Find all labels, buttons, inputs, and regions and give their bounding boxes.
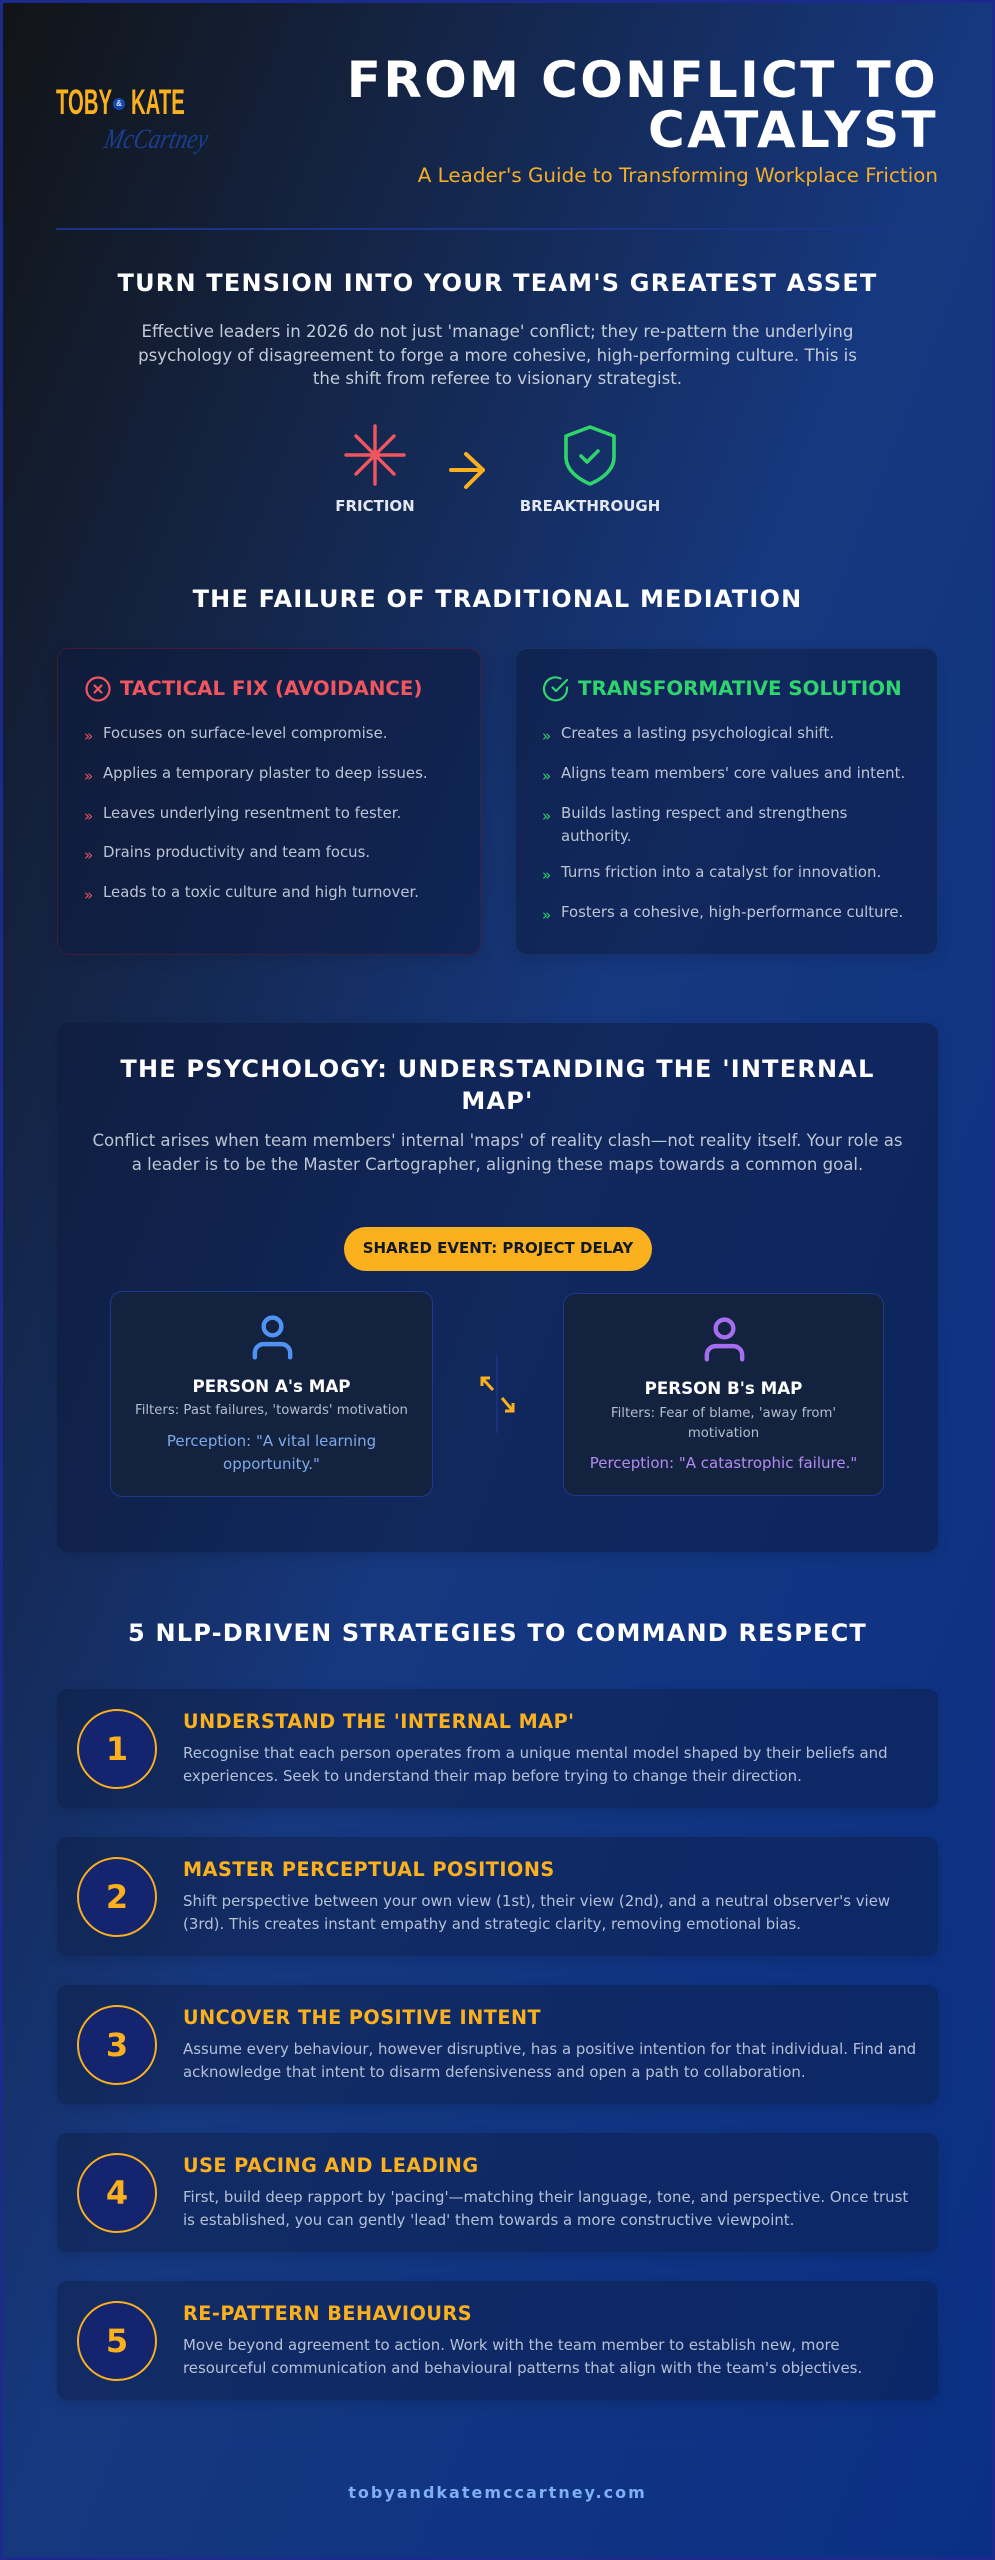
strategy description	[183, 2336, 862, 2377]
number badge	[77, 2301, 157, 2381]
strategy 1	[57, 1689, 938, 1808]
strategy description: Recognise that each person operates from a unique mental model shaped by their beliefs and	[183, 1744, 888, 1762]
list item: »	[84, 846, 93, 864]
strategy description: Move beyond agreement to action. Work with the team member to establish new, more	[183, 2336, 840, 2354]
strategy title: USE PACING AND LEADING	[183, 2154, 479, 2177]
list item: »	[542, 767, 551, 785]
intro paragraph: Effective leaders in 2026 do not just 'manage' conflict; they re-pattern the underlying	[142, 322, 853, 341]
strategy description	[183, 2188, 908, 2229]
list item: »	[84, 886, 93, 904]
title: CATALYST	[648, 101, 938, 159]
panel paragraph: a leader is to be the Master Cartographer, aligning these maps towards a common goal.	[132, 1155, 863, 1174]
strategy description: acknowledge that intent to disarm defensiveness and open a path to collaboration.	[183, 2063, 806, 2081]
strategy description: First, build deep rapport by 'pacing'—matching their language, tone, and perspective. Once trust	[183, 2188, 908, 2206]
card: person A map	[110, 1291, 433, 1497]
person A perception: Perception: "A vital learning	[167, 1432, 376, 1450]
strategy title: UNCOVER THE POSITIVE INTENT	[183, 2006, 541, 2029]
icon: person B	[704, 1317, 744, 1362]
person A perception: opportunity."	[223, 1455, 320, 1473]
logo script: McCartney: McCartney	[101, 124, 211, 155]
intro paragraph	[138, 322, 857, 388]
list item: Focuses on surface-level compromise.	[103, 724, 387, 742]
list item: Leaves underlying resentment to fester.	[103, 804, 401, 822]
person B name: PERSON B's MAP	[645, 1378, 802, 1398]
strategy title: MASTER PERCEPTUAL POSITIONS	[183, 1858, 555, 1881]
strategy description	[183, 1744, 888, 1785]
icon: x circle	[85, 676, 111, 702]
panel heading	[120, 1055, 875, 1115]
heading: turn tension: TURN TENSION INTO YOUR TEAM'S GREATEST ASSET	[118, 269, 878, 297]
strategy description: (3rd). This creates instant empathy and strategic clarity, removing emotional bias.	[183, 1915, 801, 1933]
heading: failure of traditional mediation: THE FAILURE OF TRADITIONAL MEDIATION	[193, 585, 802, 613]
strategy description	[183, 1892, 890, 1933]
subtitle: A Leader's Guide to Transforming Workplace Friction	[418, 164, 938, 187]
person B filters: motivation	[688, 1426, 759, 1441]
strategy 4	[57, 2133, 938, 2252]
number badge: 1	[106, 1730, 128, 1768]
list item: Fosters a cohesive, high-performance culture.	[561, 903, 903, 921]
list item: »	[542, 727, 551, 745]
strategy title: RE-PATTERN BEHAVIOURS	[183, 2302, 472, 2325]
list item: »	[84, 727, 93, 745]
panel paragraph	[92, 1131, 903, 1174]
list item: Builds lasting respect and strengthens	[561, 804, 847, 822]
label: breakthrough: BREAKTHROUGH	[520, 497, 660, 515]
list item: Drains productivity and team focus.	[103, 843, 370, 861]
icon: check circle	[542, 676, 568, 702]
list item: »	[542, 866, 551, 884]
list item: Creates a lasting psychological shift.	[561, 724, 834, 742]
panel heading: TRANSFORMATIVE SOLUTION	[578, 677, 902, 700]
person B filters: Filters: Fear of blame, 'away from'	[611, 1406, 836, 1421]
person B perception: Perception: "A catastrophic failure."	[590, 1454, 857, 1472]
list item: authority.	[561, 827, 631, 845]
list item: Turns friction into a catalyst for innovation.	[561, 863, 881, 881]
strategy description	[183, 2040, 916, 2081]
connector: clashing arrows	[480, 1355, 514, 1433]
strategy title: UNDERSTAND THE 'INTERNAL MAP'	[183, 1710, 575, 1733]
strategy description: Assume every behaviour, however disruptive, has a positive intention for that individual. Find and	[183, 2040, 916, 2058]
panel heading: THE PSYCHOLOGY: UNDERSTANDING THE 'INTERNAL	[120, 1055, 875, 1083]
logo ampersand badge: &	[116, 99, 122, 108]
list item: »	[84, 807, 93, 825]
logo: Toby & Kate McCartney	[56, 83, 211, 155]
person A perception	[167, 1432, 376, 1473]
list item: Applies a temporary plaster to deep issues.	[103, 764, 428, 782]
panel heading: TACTICAL FIX (AVOIDANCE)	[120, 677, 422, 700]
logo word: TOBY: TOBY	[56, 83, 112, 122]
heading: 5 NLP-driven strategies: 5 NLP-DRIVEN STRATEGIES TO COMMAND RESPECT	[128, 1619, 867, 1647]
panel: tactical fix	[57, 648, 481, 955]
strategy description: resourceful communication and behavioural patterns that align with the team's objectives.	[183, 2359, 862, 2377]
person A name: PERSON A's MAP	[192, 1376, 350, 1396]
title: FROM CONFLICT TO	[347, 51, 938, 109]
strategy description: is established, you can gently 'lead' them towards a more constructive viewpoint.	[183, 2211, 794, 2229]
list item: Leads to a toxic culture and high turnover.	[103, 883, 419, 901]
intro paragraph: the shift from referee to visionary strategist.	[313, 369, 682, 388]
intro paragraph: psychology of disagreement to forge a more cohesive, high-performing culture. This is	[138, 346, 857, 364]
person B filters	[611, 1406, 836, 1441]
number badge	[77, 2153, 157, 2233]
strategy description: Shift perspective between your own view (1st), their view (2nd), and a neutral observer's view	[183, 1892, 890, 1910]
pill: shared event: SHARED EVENT: PROJECT DELAY	[363, 1239, 633, 1257]
panel paragraph: Conflict arises when team members' internal 'maps' of reality clash—not reality itself. Your role as	[92, 1131, 903, 1150]
icon: breakthrough shield	[564, 425, 616, 486]
strategy 3	[57, 1985, 938, 2104]
list item: Aligns team members' core values and intent.	[561, 764, 905, 782]
list item	[542, 804, 847, 845]
strategy 5	[57, 2281, 938, 2400]
number badge: 2	[106, 1878, 128, 1916]
panel: psychology internal map	[57, 1023, 938, 1552]
card: person B map	[563, 1293, 884, 1496]
list item: »	[542, 906, 551, 924]
title	[347, 51, 938, 159]
number badge: 3	[106, 2026, 128, 2064]
number badge: 5	[106, 2322, 128, 2360]
person A filters: Filters: Past failures, 'towards' motivation	[135, 1403, 408, 1418]
number badge	[77, 2005, 157, 2085]
pill: shared event	[344, 1227, 652, 1271]
icon: person A	[252, 1315, 292, 1360]
number badge	[77, 1709, 157, 1789]
icon: friction star	[344, 424, 406, 486]
logo ampersand badge	[113, 98, 125, 110]
logo word: KATE: KATE	[131, 83, 185, 122]
number badge: 4	[106, 2174, 128, 2212]
arrow: friction to breakthrough	[449, 452, 486, 490]
strategy description: experiences. Seek to understand their map before trying to change their direction.	[183, 1767, 802, 1785]
number badge	[77, 1857, 157, 1937]
list item: »	[84, 767, 93, 785]
label: friction: FRICTION	[335, 497, 415, 515]
list item: »	[542, 807, 551, 825]
strategy 2	[57, 1837, 938, 1956]
panel: transformative solution	[515, 648, 938, 955]
footer website: tobyandkatemccartney.com	[348, 2483, 647, 2502]
panel heading: MAP'	[461, 1087, 534, 1115]
